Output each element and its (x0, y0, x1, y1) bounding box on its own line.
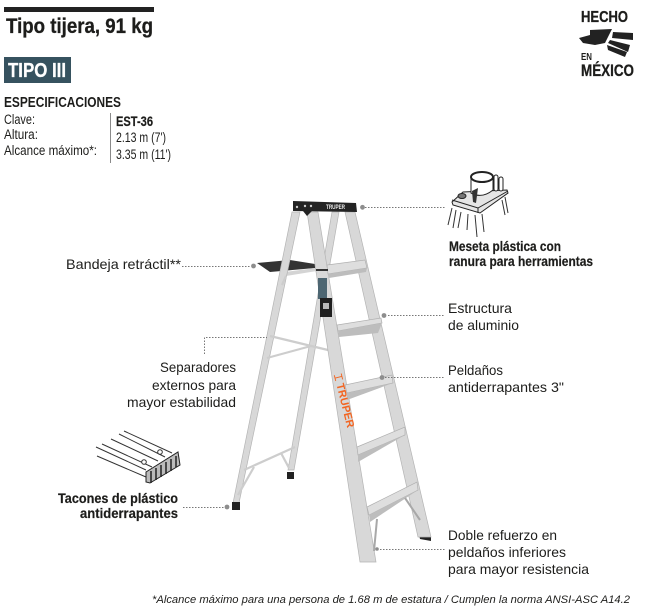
top platform: TRUPER (326, 205, 346, 211)
logo: hecho en México: EN (581, 52, 592, 63)
badge: tipo III: TIPO III (8, 60, 66, 82)
tray (257, 260, 323, 276)
callout: meseta plástica: Meseta plástica con (449, 239, 561, 254)
callout: doble refuerzo: peldaños inferiores (448, 544, 566, 560)
footnote: *Alcance máximo para una persona de 1.68 m de estatura / Cumplen la norma ANSI-ASC A14.2 (152, 594, 630, 606)
back braces (238, 276, 332, 495)
callout: doble refuerzo: para mayor resistencia (448, 561, 589, 577)
top platform (293, 201, 357, 216)
feet (232, 472, 431, 541)
ladder (232, 201, 431, 562)
callout: separadores (127, 338, 267, 410)
callout: peldaños: antiderrapantes 3" (448, 379, 564, 395)
callout: bandeja: Bandeja retráctil** (66, 256, 182, 272)
callout: separadores: Separadores (160, 359, 236, 375)
callout: peldaños (380, 362, 564, 395)
logo: hecho en México: MÉXICO (581, 61, 634, 80)
callout: tacones: Tacones de plástico (58, 491, 178, 506)
icon: plastic heels (96, 431, 180, 483)
callout: doble refuerzo: Doble refuerzo en (448, 527, 557, 543)
specifications table: Clave: (4, 112, 35, 127)
specifications table: 3.35 m (11') (116, 147, 171, 162)
icon: eagle (579, 29, 633, 57)
specifications table: Alcance máximo*: (4, 143, 97, 158)
label on rail (316, 269, 332, 317)
callout: separadores: externos para (152, 377, 236, 393)
callout: estructura (382, 300, 519, 333)
callout: meseta plástica: ranura para herramientas (449, 254, 593, 269)
back rails (233, 212, 339, 503)
callout: estructura: de aluminio (448, 317, 519, 333)
callout: meseta plástica (360, 172, 593, 269)
icon: tool tray (448, 172, 508, 237)
title: Tipo tijera, 91 kg (6, 15, 153, 38)
front rails (307, 212, 431, 562)
callout: tacones: antiderrapantes (80, 506, 178, 521)
steps (327, 260, 418, 522)
lower reinforcement (374, 498, 420, 551)
specifications table (4, 94, 171, 163)
logo: hecho en México (579, 9, 634, 80)
callout: separadores: mayor estabilidad (127, 394, 236, 410)
specifications table: 2.13 m (7') (116, 130, 166, 145)
title (4, 7, 154, 38)
logo: hecho en México: HECHO (581, 9, 628, 26)
callout: estructura: Estructura (448, 300, 512, 316)
callout: bandeja (66, 256, 256, 272)
callout: peldaños: Peldaños (448, 362, 503, 378)
specifications table: Altura: (4, 127, 38, 142)
specifications table: EST-36 (116, 114, 153, 129)
specifications table: ESPECIFICACIONES (4, 94, 121, 111)
callout: doble refuerzo (375, 527, 589, 577)
brand on rail: ⌶ TRUPER (331, 373, 356, 429)
callout: tacones (58, 431, 229, 521)
